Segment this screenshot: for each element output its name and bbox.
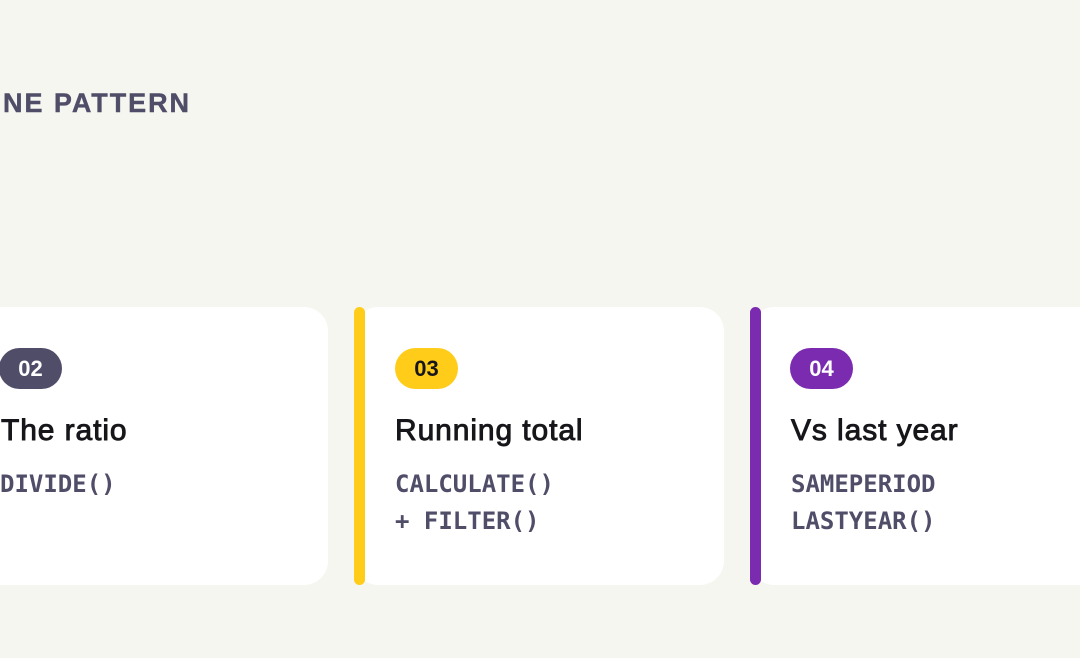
card 02 number badge	[0, 348, 62, 389]
card 02 background	[0, 307, 328, 585]
panel: card 04 vs last year	[750, 307, 1080, 585]
card 04 number badge: 04	[809, 356, 834, 381]
card 02 title: The ratio	[1, 414, 128, 447]
card 03 accent bar	[354, 307, 365, 585]
card 04 accent bar	[750, 307, 761, 585]
panel: card 02 the ratio	[0, 307, 328, 585]
card 03 title: Running total	[395, 414, 584, 447]
card 03 background	[354, 307, 724, 585]
card 04 formula: SAMEPERIOD LASTYEAR()	[791, 470, 936, 535]
card 03 number badge	[395, 348, 458, 389]
card 04 number badge	[790, 348, 853, 389]
card 03 number badge: 03	[414, 356, 439, 381]
card 02 formula: DIVIDE()	[0, 470, 116, 498]
heading: pattern label: NE PATTERN	[3, 88, 191, 118]
card 02 number badge: 02	[18, 356, 43, 381]
card 04 background	[750, 307, 1080, 585]
card 04 title: Vs last year	[791, 414, 959, 447]
card 03 formula: CALCULATE() + FILTER()	[395, 470, 554, 535]
panel: card 03 running total	[354, 307, 724, 585]
